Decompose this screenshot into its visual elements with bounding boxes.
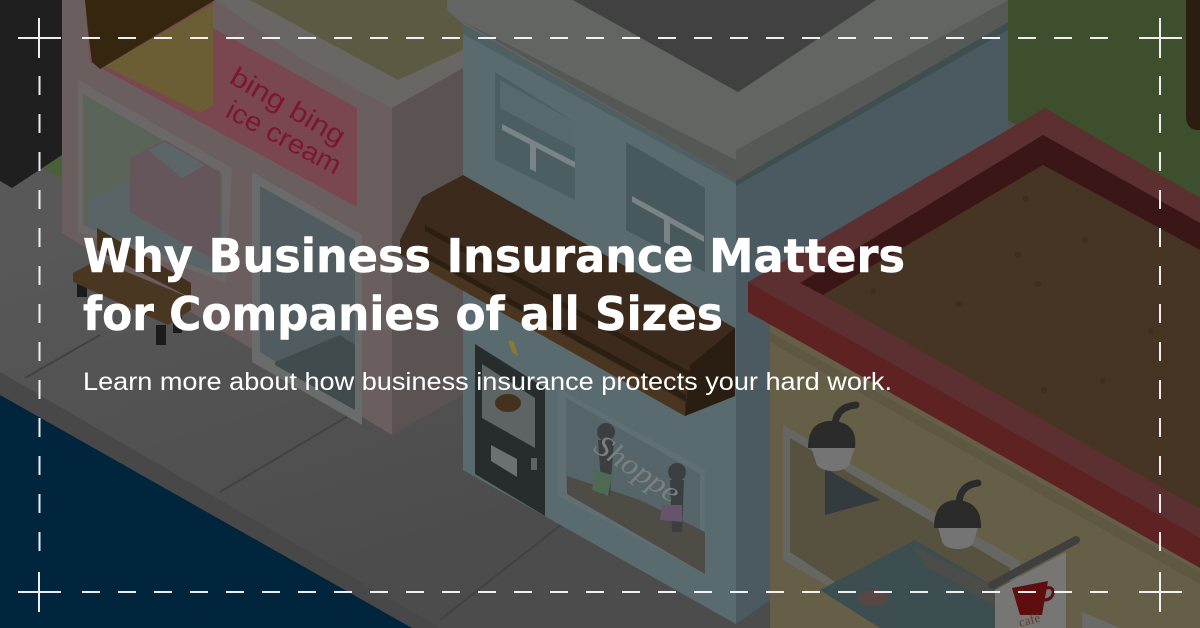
- lamp right: [934, 483, 981, 549]
- title: for Companies of all Sizes: [83, 287, 723, 341]
- green backdrop top right: [1008, 0, 1200, 230]
- lamp left: [808, 405, 856, 471]
- blue shop: [447, 0, 1010, 624]
- subtitle: Learn more about how business insurance protects your hard work.: [83, 368, 892, 396]
- shoppe window: [558, 388, 705, 574]
- cafe hanging sign: [992, 540, 1120, 628]
- street and curb: [0, 372, 440, 628]
- shop door: [475, 340, 545, 516]
- bing bing sign text: [221, 61, 351, 180]
- far left dark building: [0, 0, 62, 188]
- bing bing sign text: bing bing: [225, 61, 351, 151]
- bench: [73, 228, 191, 345]
- bing bing sign text: ice cream: [221, 95, 347, 180]
- title: [83, 229, 905, 341]
- pavement lines: [25, 335, 562, 620]
- brown awning: [400, 175, 735, 416]
- shoppe window: Shoppe: [588, 428, 686, 509]
- ice cream shop: [62, 0, 463, 435]
- cafe building: [748, 108, 1200, 628]
- title: Why Business Insurance Matters: [83, 229, 905, 283]
